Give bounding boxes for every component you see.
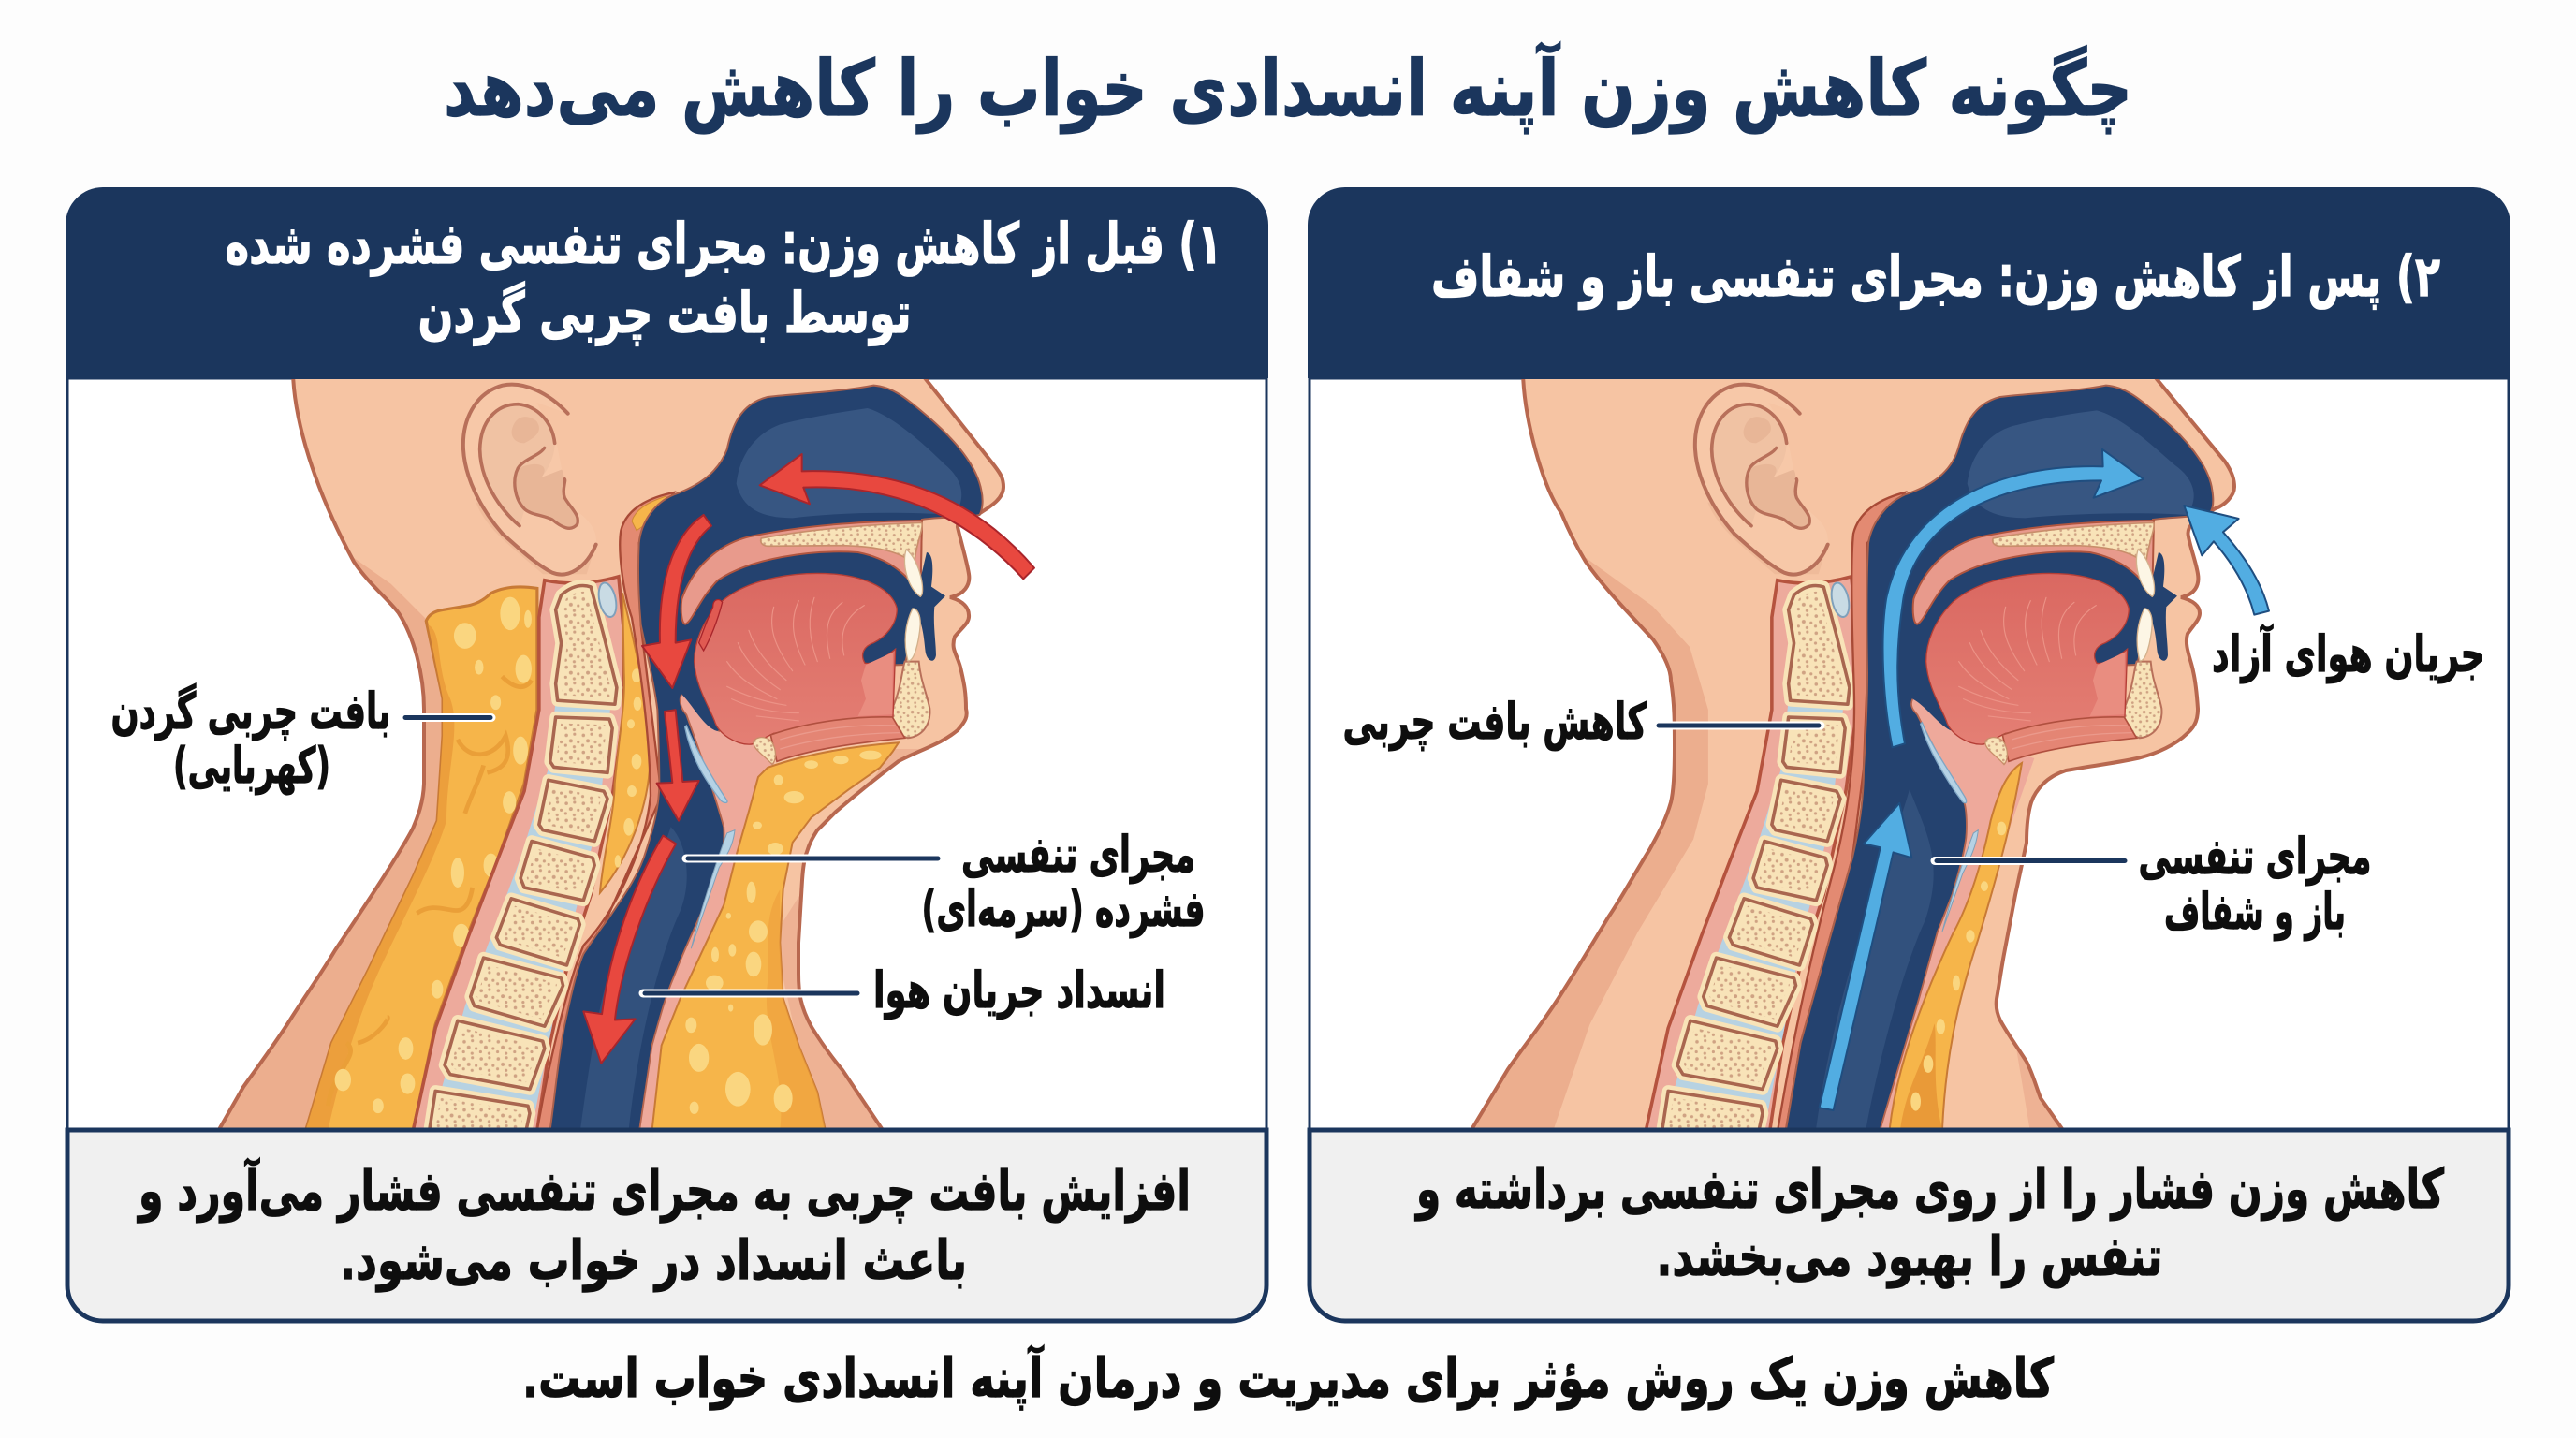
- blue arrow: nasal inflow: [2184, 506, 2269, 615]
- caption box: after: [1310, 1130, 2509, 1321]
- callout line: open airway: [1935, 857, 2125, 865]
- red arrow: nasal inflow: [760, 454, 1034, 579]
- head and neck skin: [1470, 374, 2234, 1133]
- callout line: neck fat: [403, 713, 491, 722]
- pharyngeal wall: [537, 492, 674, 1130]
- skin outline: [1470, 374, 2234, 1133]
- anatomy illustration: after: [1423, 374, 2269, 1139]
- conclusion line: کاهش وزن یک روش مؤثر برای مدیریت و درمان آپنه انسدادی خواب است.: [522, 1344, 2054, 1411]
- panel: before weight loss: [66, 187, 1268, 1321]
- label: amber note: (کهربایی): [173, 738, 330, 795]
- compressed airway: [550, 386, 983, 1130]
- panel: after weight loss: [1308, 187, 2510, 1321]
- uvula: [699, 599, 723, 651]
- callout line: reduced fat: [1659, 721, 1821, 730]
- red arrow: mid pharynx: [657, 710, 699, 821]
- heading: before line 2: توسط بافت چربی گردن: [417, 281, 912, 346]
- label: open airway 2: باز و شفاف: [2164, 884, 2346, 941]
- cervical spine: [1646, 577, 1857, 1139]
- mouth, tongue and jaw: [1913, 521, 2177, 765]
- panel header: after: [1308, 187, 2510, 378]
- blue arrow: main airway: [1883, 449, 2144, 747]
- fat pad at skull base: [632, 496, 667, 531]
- panel header: before: [66, 187, 1268, 378]
- title: چگونه کاهش وزن آپنه انسدادی خواب را کاهش می‌دهد: [444, 41, 2132, 135]
- ear: [463, 385, 596, 574]
- label: reduced fat: کاهش بافت چربی: [1342, 694, 1647, 751]
- retropharyngeal fat strip: [600, 593, 651, 893]
- red arrow: lower airway: [583, 836, 676, 1064]
- cervical spine: [413, 577, 624, 1139]
- label: airflow obstruction: انسداد جریان هوا: [873, 962, 1165, 1020]
- blue arrow: lower airway: [1820, 803, 1911, 1110]
- open airway: [1786, 386, 2213, 1130]
- heading: before line 1: ۱) قبل از کاهش وزن: مجرای تنفسی فشرده شده: [225, 212, 1222, 277]
- pharyngeal wall: [1778, 492, 1905, 1130]
- caption box: before: [67, 1130, 1266, 1321]
- head and neck skin: [295, 379, 1002, 1070]
- neck skin shading: [1423, 558, 2127, 1132]
- callout line: compressed airway: [686, 854, 938, 863]
- illustration frame: after: [1310, 378, 2509, 1130]
- red arrow: upper pharynx: [642, 515, 711, 688]
- label: open airway 1: مجرای تنفسی: [2138, 829, 2372, 886]
- callout line: airflow obstruction: [643, 989, 858, 998]
- posterior neck fat: [306, 587, 537, 1130]
- skin outline: [217, 374, 1003, 1133]
- mouth, tongue and jaw: [681, 521, 945, 765]
- neck skin shading: [168, 558, 943, 1133]
- caption: after line 2: تنفس را بهبود می‌بخشد.: [1657, 1225, 2162, 1289]
- caption: before line 1: افزایش بافت چربی به مجرای تنفسی فشار می‌آورد و: [137, 1157, 1191, 1224]
- pink throat tissue and thin fat: [1881, 699, 2034, 1130]
- anatomy illustration: before: [168, 374, 1034, 1139]
- label: neck fat: بافت چربی گردن: [110, 682, 391, 741]
- pink throat tissue and front neck fat: [639, 695, 899, 1130]
- illustration frame: before: [67, 378, 1266, 1130]
- caption: before line 2: باعث انسداد در خواب می‌شود.: [340, 1228, 967, 1293]
- label: compressed airway 2: فشرده (سرمه‌ای): [921, 881, 1206, 938]
- ear: [1695, 385, 1828, 574]
- label: compressed airway 1: مجرای تنفسی: [961, 827, 1195, 884]
